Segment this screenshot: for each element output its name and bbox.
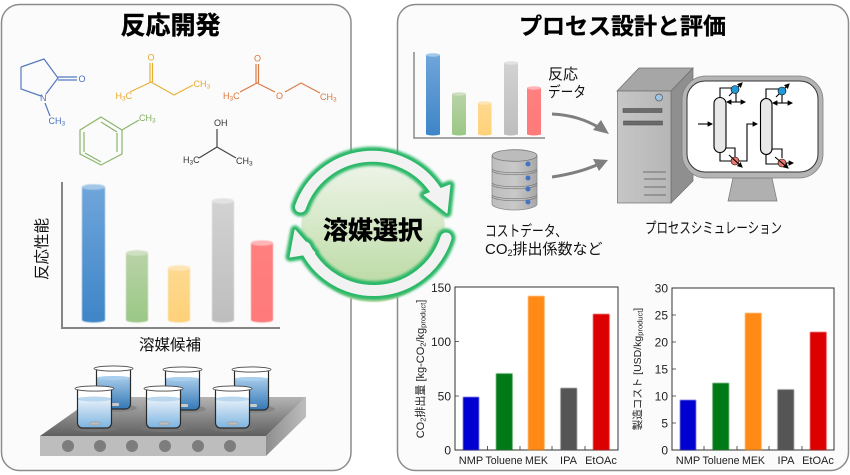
molecule: MEK: O <box>148 52 155 62</box>
heading: reaction development: 反応開発 <box>120 12 221 40</box>
arrow: upper clockwise <box>300 156 450 213</box>
y tick labels: 0 <box>661 444 668 458</box>
molecule: ethyl acetate: 3 <box>333 96 337 104</box>
molecule: isopropanol: OH <box>214 118 228 128</box>
y axis label: CO <box>415 422 427 438</box>
label: cost data and CO2 emission factors <box>485 222 603 258</box>
molecule: MEK: CH <box>194 79 206 89</box>
molecule: ethyl acetate: H <box>223 91 230 101</box>
monitor stand <box>728 178 777 201</box>
small bar chart: reaction data <box>414 52 545 138</box>
molecule: ethyl acetate: O <box>276 91 283 101</box>
molecule: isopropanol: CH <box>236 156 249 166</box>
bar: blue cylinder <box>82 184 105 322</box>
y tick labels: 30 <box>655 282 668 296</box>
molecule: isopropanol: 3 <box>249 160 253 168</box>
illustration: beakers on stirrer plate <box>40 366 306 456</box>
molecule: MEK: 3 <box>122 96 126 102</box>
green glow behind arrows <box>290 156 450 291</box>
molecule: isopropanol: 3 <box>190 160 194 166</box>
y axis label: product <box>636 310 644 336</box>
molecule: MEK: H <box>116 91 122 101</box>
x category labels: IPA <box>560 455 578 467</box>
y tick labels: 15 <box>655 362 668 376</box>
label: reaction data: データ <box>548 83 586 101</box>
y axis label: 製造コスト [USD/kg <box>632 336 644 430</box>
molecule: NMP: CH <box>48 116 62 126</box>
molecule: isopropanol <box>183 118 253 168</box>
molecule: MEK: 3 <box>206 84 210 90</box>
x category labels: NMP <box>676 455 700 467</box>
y tick labels: 0 <box>444 444 451 458</box>
molecule: ethyl acetate: O <box>254 54 261 64</box>
y tick labels: 150 <box>431 281 451 295</box>
y axis label: 2 <box>418 418 428 422</box>
y tick labels: 5 <box>661 416 668 430</box>
y tick labels: 10 <box>655 390 668 404</box>
label: solvent selection: 溶媒選択 <box>323 217 423 245</box>
molecule: ethyl acetate: CH <box>320 92 333 102</box>
bars <box>463 296 610 450</box>
x category labels: EtOAc <box>802 455 834 467</box>
arrow: lower clockwise <box>290 230 446 291</box>
monitor <box>682 76 823 178</box>
label: cost data and CO2 emission factors: CO <box>485 241 508 258</box>
y axis label: 排出量 [kg-CO <box>413 346 427 418</box>
arrow: reaction data to simulation <box>552 114 609 134</box>
chart: CO2 emissions <box>413 281 618 467</box>
y axis label: /kg <box>415 328 427 343</box>
molecule: ethyl acetate: C <box>233 91 240 101</box>
label: cost data and CO2 emission factors: コストデータ、 <box>485 222 567 240</box>
x category labels: Toluene <box>702 455 740 467</box>
label: cost data and CO2 emission factors: 2 <box>508 248 513 258</box>
molecule: NMP <box>21 59 86 128</box>
molecule: NMP: N <box>40 93 46 103</box>
bar: red cylinder <box>251 240 273 322</box>
axis label: solvent candidates: 溶媒候補 <box>139 336 201 354</box>
y axis label: 2 <box>418 343 428 347</box>
y tick labels <box>431 281 451 458</box>
molecule: MEK: C <box>126 91 133 101</box>
x category labels <box>459 455 617 467</box>
x category labels <box>676 455 834 467</box>
bar: yellow cylinder <box>168 265 190 322</box>
label: cost data and CO2 emission factors: 排出係数など <box>513 241 603 258</box>
bars <box>680 313 826 450</box>
heading: process design and evaluation: プロセス設計と評価 <box>519 13 726 39</box>
x category labels: MEK <box>742 455 766 467</box>
molecule: isopropanol: C <box>193 155 200 165</box>
axis label: reaction performance: 反応性能 <box>33 218 51 280</box>
y tick labels: 50 <box>438 390 451 404</box>
molecule: toluene <box>80 113 156 165</box>
molecule: ethyl acetate: 3 <box>230 96 234 102</box>
molecule: NMP: O <box>78 74 86 84</box>
disc <box>301 158 445 302</box>
chart: production cost <box>631 282 834 467</box>
icon: computer running process simulation <box>617 68 823 237</box>
bar chart: reaction performance by solvent candidate <box>33 182 280 354</box>
molecule: toluene: 3 <box>152 118 156 124</box>
process flow diagram <box>698 83 793 168</box>
bar: gray cylinder <box>212 198 234 322</box>
label: process simulation: プロセスシミュレーション <box>645 220 782 237</box>
arrow: database to simulation <box>552 159 608 177</box>
y axis label: product <box>418 302 428 328</box>
stirrer plate <box>40 397 306 456</box>
x category labels: IPA <box>778 455 795 467</box>
icon: database <box>492 150 537 210</box>
molecule: MEK <box>116 52 210 102</box>
x category labels: NMP <box>459 455 483 467</box>
molecule: NMP: 3 <box>62 120 66 128</box>
y axis label: ] <box>415 300 427 303</box>
molecule: ethyl acetate <box>223 54 337 104</box>
y tick labels: 100 <box>431 335 451 349</box>
y tick labels: 20 <box>655 336 668 350</box>
label: reaction data: 反応 <box>548 66 578 83</box>
label: reaction data <box>548 66 586 101</box>
y tick labels: 25 <box>655 308 668 322</box>
cycle graphic: solvent selection <box>290 156 450 302</box>
x category labels: EtOAc <box>585 455 617 467</box>
y axis label: ] <box>632 308 644 311</box>
y tick labels <box>655 282 668 458</box>
molecule: toluene: CH <box>139 113 152 123</box>
bar: green cylinder <box>126 250 148 322</box>
x category labels: MEK <box>525 455 549 467</box>
x category labels: Toluene <box>486 455 522 467</box>
computer tower <box>617 68 693 203</box>
molecule: isopropanol: H <box>183 155 190 165</box>
